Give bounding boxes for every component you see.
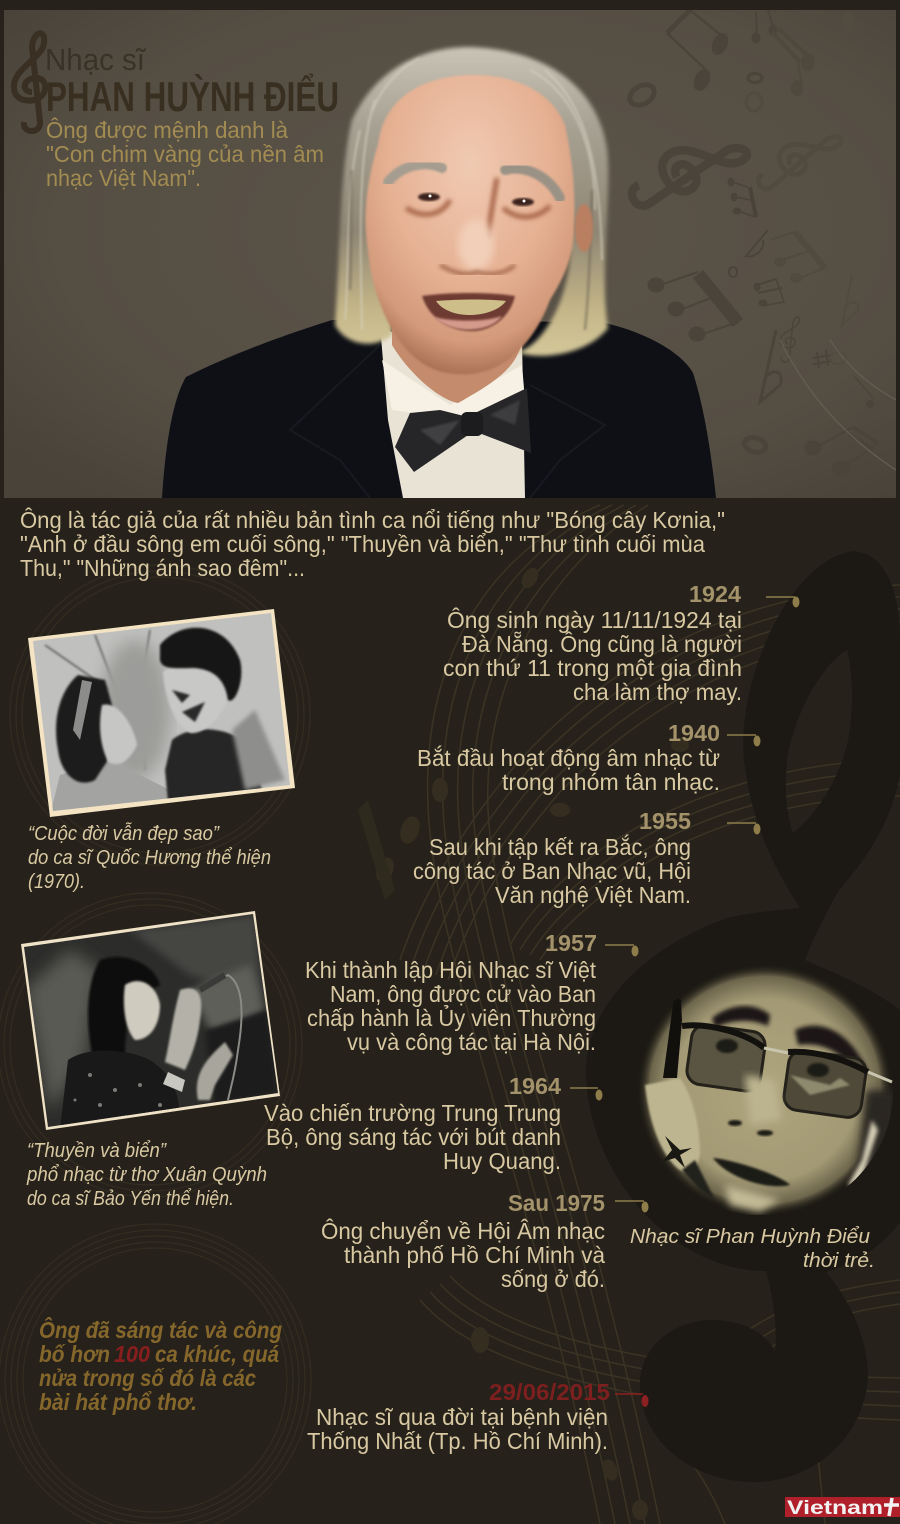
subtitle bbox=[46, 116, 324, 191]
portrait: nose bbox=[458, 219, 494, 271]
caption 3: thời trẻ. bbox=[803, 1250, 875, 1272]
nose bbox=[728, 1120, 742, 1126]
woman face bbox=[100, 704, 137, 764]
hand bbox=[645, 1078, 700, 1173]
ring staves bbox=[0, 565, 311, 1524]
timeline: 29/06/2015: 29/06/2015 bbox=[489, 1379, 610, 1405]
woman hair bbox=[56, 675, 112, 783]
treble clef large bbox=[628, 144, 751, 210]
timeline: 1964: 1964 bbox=[509, 1073, 561, 1099]
timeline: 1924: con thứ 11 trong một gia đình bbox=[443, 655, 742, 681]
portrait: bow tie bbox=[395, 388, 531, 472]
portrait: suit bbox=[162, 320, 716, 498]
timeline: 1964: Vào chiến trường Trung Trung bbox=[264, 1100, 561, 1126]
triple beam note bbox=[698, 274, 738, 323]
timeline: 1957: 1957 bbox=[545, 930, 597, 956]
timeline: 29/06/2015: Thống Nhất (Tp. Hồ Chí Minh). bbox=[307, 1428, 608, 1454]
beamed note bottom bbox=[815, 427, 878, 468]
man hair bbox=[160, 628, 241, 701]
callout: over 100 songs: nửa trong số đó là các bbox=[39, 1365, 256, 1391]
brows bbox=[712, 1006, 770, 1028]
singer hand bbox=[197, 1042, 233, 1100]
timeline: Sau 1975: Ông chuyển về Hội Âm nhạc bbox=[321, 1217, 605, 1244]
decorative music notes on header bbox=[622, 10, 896, 475]
timeline: 29/06/2015: Nhạc sĩ qua đời tại bệnh viện bbox=[316, 1404, 608, 1430]
caption 2 bbox=[26, 1140, 267, 1210]
timeline: 1957: chấp hành là Ủy viên Thường bbox=[307, 1003, 596, 1031]
portrait: neck bbox=[392, 327, 520, 403]
treble clef faint bbox=[756, 183, 761, 190]
callout: over 100 songs: Ông đã sáng tác và công bbox=[39, 1316, 282, 1343]
caption 3 bbox=[630, 1226, 875, 1272]
big treble clef silhouette bbox=[586, 551, 900, 1482]
woman body bbox=[52, 762, 171, 811]
singer dress bbox=[60, 1051, 180, 1130]
timeline: 1924: Đà Nẵng. Ông cũng là người bbox=[462, 630, 742, 657]
glasses bbox=[682, 1023, 892, 1119]
timeline: 1940: 1940 bbox=[668, 720, 720, 746]
subtitle: "Con chim vàng của nền âm bbox=[46, 141, 324, 167]
timeline: 1924: cha làm thợ may. bbox=[573, 679, 742, 705]
timeline: 1955: công tác ở Ban Nhạc vũ, Hội bbox=[413, 858, 691, 884]
timeline: Sau 1975: Sau 1975 bbox=[508, 1190, 605, 1216]
intro text: "Anh ở đầu sông em cuối sông," "Thuyền và biển," "Thư tình cuối mùa bbox=[20, 531, 705, 557]
timeline: Sau 1975 bbox=[321, 1190, 648, 1292]
timeline: 1955: 1955 bbox=[639, 808, 691, 834]
callout: over 100 songs: ca khúc, quá bbox=[155, 1341, 279, 1367]
timeline: 1955: Sau khi tập kết ra Bắc, ông bbox=[429, 834, 691, 860]
timeline: 1940: trong nhóm tân nhạc. bbox=[502, 769, 720, 795]
portrait: face bbox=[366, 75, 574, 374]
pen bbox=[663, 997, 682, 1078]
small clef bbox=[780, 316, 800, 363]
timeline: 1924 bbox=[443, 581, 800, 705]
timeline: 1955 bbox=[413, 808, 760, 908]
caption 1: do ca sĩ Quốc Hương thể hiện bbox=[28, 847, 271, 869]
timeline: 1964 bbox=[264, 1073, 602, 1174]
caption 1: (1970). bbox=[28, 871, 85, 893]
caption 1: “Cuộc đời vẫn đẹp sao” bbox=[28, 822, 220, 845]
timeline: 1940 bbox=[417, 720, 760, 795]
caption 3: Nhạc sĩ Phan Huỳnh Điểu bbox=[630, 1226, 870, 1248]
callout: over 100 songs bbox=[39, 1316, 282, 1415]
man face bbox=[162, 668, 208, 735]
caption 1 bbox=[28, 822, 271, 893]
timeline: 1957: Khi thành lập Hội Nhạc sĩ Việt bbox=[305, 957, 597, 983]
portrait: shirt bbox=[380, 325, 525, 498]
portrait: hair strands bbox=[345, 58, 602, 330]
flats and sharp bbox=[760, 330, 781, 402]
singer face bbox=[124, 981, 160, 1040]
intro text bbox=[20, 506, 725, 581]
Vietnam+ logo bbox=[785, 1497, 900, 1519]
small notes bbox=[734, 182, 754, 218]
timeline: 1924: 1924 bbox=[689, 581, 741, 607]
caption 2: phổ nhạc từ thơ Xuân Quỳnh bbox=[26, 1164, 267, 1186]
timeline: 1940: Bắt đầu hoạt động âm nhạc từ bbox=[417, 745, 720, 771]
Vietnam+ logo: Vietnam bbox=[787, 1498, 883, 1519]
timeline: 1957: Nam, ông được cử vào Ban bbox=[330, 981, 596, 1007]
subtitle: Ông được mệnh danh là bbox=[46, 116, 288, 143]
title clef bbox=[14, 33, 45, 131]
callout: over 100 songs: 100 bbox=[114, 1341, 150, 1367]
timeline: 29/06/2015 bbox=[307, 1379, 648, 1454]
caption 2: “Thuyền và biển” bbox=[27, 1140, 167, 1162]
timeline: 1957: vụ và công tác tại Hà Nội. bbox=[347, 1029, 596, 1055]
dark side hair bbox=[852, 1084, 893, 1167]
callout: over 100 songs: bài hát phổ thơ. bbox=[39, 1389, 197, 1415]
timeline: Sau 1975: sống ở đó. bbox=[501, 1266, 605, 1292]
portrait bbox=[162, 47, 716, 498]
photo: Cuộc đời vẫn đẹp sao bbox=[20, 600, 300, 820]
mouth bbox=[713, 1158, 790, 1186]
subtitle: nhạc Việt Nam". bbox=[46, 165, 201, 191]
intro text: Thu," "Những ánh sao đêm"... bbox=[20, 555, 305, 581]
caption 2: do ca sĩ Bảo Yến thể hiện. bbox=[27, 1188, 234, 1210]
portrait: eyes bbox=[406, 178, 550, 240]
title bbox=[48, 48, 338, 112]
timeline: 1955: Văn nghệ Việt Nam. bbox=[495, 882, 691, 908]
man shirt bbox=[165, 729, 262, 802]
timeline: 1964: Bộ, ông sáng tác với bút danh bbox=[266, 1124, 561, 1150]
timeline: Sau 1975: thành phố Hồ Chí Minh và bbox=[344, 1242, 605, 1268]
title: PHAN HUỲNH ĐIỂU bbox=[46, 72, 339, 120]
microphone cable bbox=[225, 974, 242, 1100]
callout: over 100 songs: bố hơn bbox=[39, 1341, 110, 1367]
timeline: 1924: Ông sinh ngày 11/11/1924 tại bbox=[447, 606, 742, 633]
singer hair bbox=[86, 956, 160, 1052]
portrait: eyebrows bbox=[388, 164, 442, 182]
intro text: Ông là tác giả của rất nhiều bản tình ca nổi tiếng như "Bóng cây Kơnia," bbox=[20, 506, 725, 533]
young portrait photo bbox=[637, 964, 895, 1216]
photo: Thuyền và biển bbox=[20, 905, 285, 1135]
portrait: back hair bbox=[335, 47, 608, 356]
timeline: 1964: Huy Quang. bbox=[443, 1148, 561, 1174]
header photo panel bbox=[4, 10, 896, 498]
singer arm bbox=[165, 988, 201, 1070]
title: Nhạc sĩ bbox=[45, 42, 146, 77]
timeline: 1957 bbox=[305, 930, 638, 1055]
portrait: mouth bbox=[422, 293, 515, 331]
decorative music staves background bbox=[358, 505, 900, 1524]
